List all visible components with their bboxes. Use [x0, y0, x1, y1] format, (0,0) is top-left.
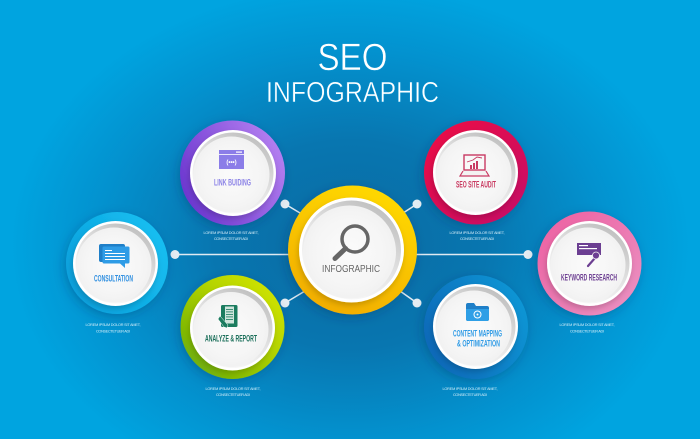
label: infographic: INFOGRAPHIC: [322, 264, 380, 275]
text: link building description: CONSECTETUER ADI: [214, 237, 248, 241]
text: consultation description: CONSECTETUER ADI: [96, 330, 130, 334]
text: audit description: [450, 231, 505, 241]
icon: chat bubble: [99, 244, 130, 268]
connector lines: [170, 200, 532, 308]
text: analyze description: CONSECTETUER ADI: [216, 393, 250, 397]
node: link building: [180, 120, 285, 226]
text: link building description: [204, 231, 259, 241]
label: keyword research: KEYWORD RESEARCH: [561, 272, 617, 282]
title: [266, 37, 439, 109]
text: keyword description: [560, 323, 615, 334]
text: consultation description: [86, 323, 141, 334]
label: content mapping: & OPTIMIZATION: [457, 338, 500, 348]
icon: clipboard: [218, 305, 238, 328]
label: analyze and report: ANALYZE & REPORT: [205, 334, 257, 344]
node: seo site audit: [424, 120, 528, 224]
icon: folder with gear: [466, 303, 489, 321]
text: consultation description: LOREM IPSUM DOLOR SIT AMET,: [86, 323, 141, 327]
text: content description: CONSECTETUER ADI: [453, 393, 487, 397]
title: INFOGRAPHIC: [266, 77, 439, 109]
node: consultation: [66, 212, 168, 314]
text: keyword description: LOREM IPSUM DOLOR SIT AMET,: [560, 323, 615, 327]
node: central infographic: [288, 186, 417, 314]
text: audit description: CONSECTETUER ADI: [460, 237, 494, 241]
label: consultation: CONSULTATION: [94, 274, 133, 284]
icon: laptop with chart: [460, 155, 489, 176]
text: keyword description: CONSECTETUER ADI: [570, 330, 604, 334]
label: content mapping: [453, 328, 502, 348]
label: content mapping: CONTENT MAPPING: [453, 328, 502, 338]
title: SEO: [318, 37, 388, 79]
label: seo site audit: SEO SITE AUDIT: [456, 180, 496, 190]
text: analyze description: LOREM IPSUM DOLOR SIT AMET,: [206, 387, 261, 391]
text: content description: LOREM IPSUM DOLOR SIT AMET,: [442, 387, 498, 391]
text: analyze description: [206, 387, 261, 397]
node: keyword research: [538, 212, 642, 316]
text: content description: [442, 387, 498, 397]
text: link building description: LOREM IPSUM DOLOR SIT AMET,: [204, 231, 259, 235]
text: audit description: LOREM IPSUM DOLOR SIT AMET,: [450, 231, 505, 235]
icon: browser window: (•••): [226, 160, 237, 166]
node: analyze and report: [180, 275, 284, 379]
icon: card and key: [577, 243, 601, 266]
label: link building: LINK BUIDING: [214, 178, 251, 188]
icon: magnifier: [335, 226, 368, 258]
node: content mapping: [424, 275, 528, 379]
